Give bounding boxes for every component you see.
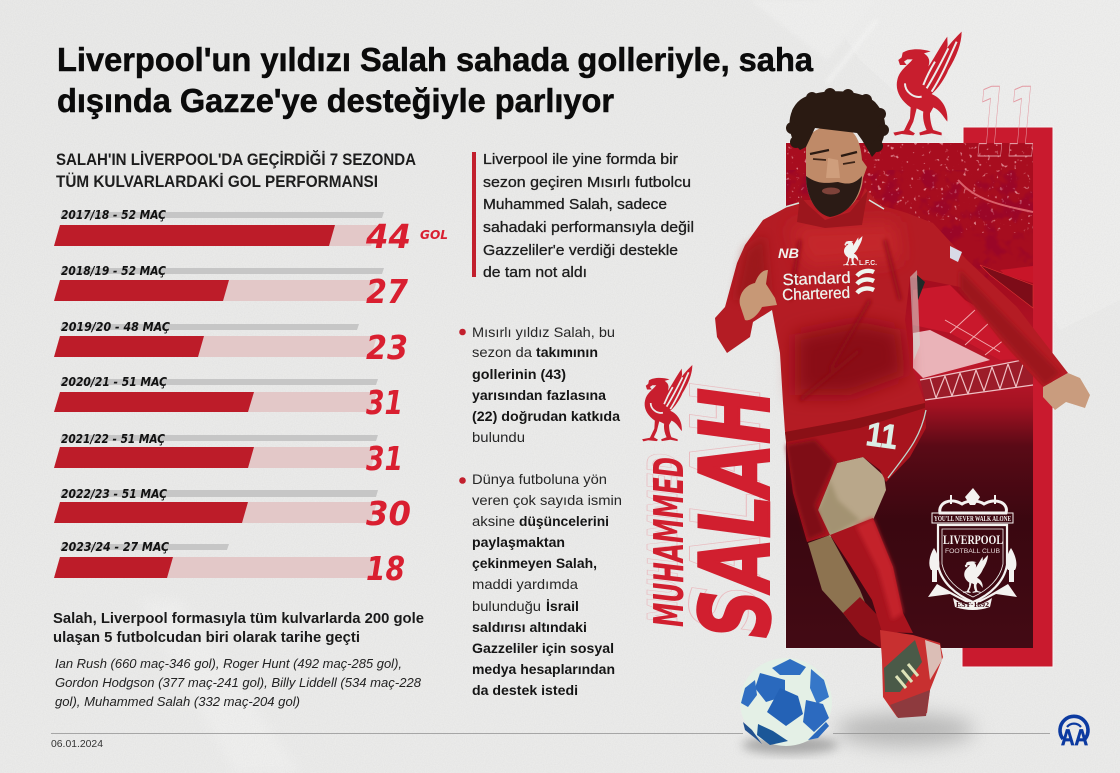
title: dışında Gazze'ye desteğiyle parlıyor xyxy=(57,82,614,119)
chart heading: SALAH'IN LİVERPOOL'DA GEÇİRDİĞİ 7 SEZONDA xyxy=(56,150,416,169)
bullet: goals contribution: takımının xyxy=(536,344,598,360)
bar row 2019/20 xyxy=(54,320,408,367)
sponsor wordmark: Standard xyxy=(782,270,851,289)
icon: AA agency logo xyxy=(1060,716,1088,750)
kit maker mark: NB xyxy=(778,245,799,261)
bullet: support for Gaza: saldırısı altındaki xyxy=(472,619,587,635)
title xyxy=(57,41,814,119)
bullet: support for Gaza: Dünya futboluna yön xyxy=(472,471,607,487)
bullet: support for Gaza: İsrail xyxy=(546,598,579,614)
bullet: support for Gaza: aksine xyxy=(472,513,515,529)
note: 200 goal club: Ian Rush (660 maç-346 gol), Roger Hunt (492 maç-285 gol), xyxy=(55,657,402,671)
bar row 2017/18: GOL xyxy=(420,228,448,242)
bar row 2019/20: 2019/20 - 48 MAÇ xyxy=(61,320,170,334)
note: 200 goal club: Gordon Hodgson (377 maç-241 gol), Billy Liddell (534 maç-228 xyxy=(55,676,421,690)
bar row 2023/24: 2023/24 - 27 MAÇ xyxy=(61,540,169,554)
bar row 2021/22: 31 xyxy=(366,439,403,478)
shield xyxy=(938,525,1007,602)
vertical name: SALAH: SALAH xyxy=(671,382,783,632)
panel: red backing strip xyxy=(786,127,1053,667)
title: Liverpool'un yıldızı Salah sahada golleriyle, saha xyxy=(57,41,814,78)
bullet: goals contribution: sezon da xyxy=(472,344,532,360)
lower roof truss xyxy=(920,358,1033,400)
bar row 2020/21: 31 xyxy=(366,383,403,422)
note: 200 goal club: gol), Muhammed Salah (332 maç-204 gol) xyxy=(55,695,300,709)
bullet: support for Gaza: Gazzeliler için sosyal xyxy=(472,640,614,656)
vertical name: MUHAMMED: MUHAMMED xyxy=(645,457,693,627)
bullet: goals contribution: gollerinin (43) xyxy=(472,366,566,382)
bullet: support for Gaza: maddi yardımda xyxy=(472,576,578,592)
intro text block xyxy=(472,152,694,281)
collar xyxy=(785,190,884,228)
vertical name: MUHAMMED: MUHAMMED xyxy=(639,453,687,623)
shorts number 11: 11 xyxy=(864,415,900,457)
ground shadow xyxy=(835,714,975,746)
sponsor logo xyxy=(857,271,874,293)
footer line and date: 06.01.2024 xyxy=(51,738,103,750)
bullet: support for Gaza: medya hesaplarından xyxy=(472,661,615,677)
red stands xyxy=(913,285,1033,360)
bullet: goals contribution: bulundu xyxy=(472,429,525,445)
bar row 2023/24 xyxy=(54,540,405,588)
shield: FOOTBALL CLUB xyxy=(945,548,1000,555)
sponsor wordmark: Chartered xyxy=(782,285,850,304)
thigh xyxy=(818,457,886,537)
intro text block: de tam not aldı xyxy=(483,265,587,281)
club badge: L.F.C. xyxy=(859,260,877,267)
bar row 2020/21 xyxy=(54,375,403,422)
intro text block: sahadaki performansıyla değil xyxy=(483,220,694,236)
sleeve badge xyxy=(950,246,962,262)
boot xyxy=(880,630,943,718)
bar row 2017/18: 44 xyxy=(365,217,411,256)
text: 11 xyxy=(976,69,1038,179)
intro text block: Liverpool ile yine formda bir xyxy=(483,152,678,168)
upper roof truss xyxy=(980,265,1033,308)
bar row 2022/23: 30 xyxy=(366,494,411,533)
note: 200 goal club: ulaşan 5 futbolcudan biri olarak tarihe geçti xyxy=(53,630,360,646)
ribbon: EST·1892 xyxy=(956,600,989,609)
note: 200 goal club xyxy=(53,611,424,709)
left hand xyxy=(740,270,777,320)
chart heading: TÜM KULVARLARDAKİ GOL PERFORMANSI xyxy=(56,172,378,191)
bullet: support for Gaza: bulunduğu xyxy=(472,598,541,614)
sponsor wordmark xyxy=(781,270,851,304)
sock xyxy=(830,518,913,633)
icon: small liver bird xyxy=(642,365,692,441)
bullet: support for Gaza xyxy=(459,471,622,698)
bullet: support for Gaza: veren çok sayıda ismin xyxy=(472,492,622,508)
bar row 2021/22: 2021/22 - 51 MAÇ xyxy=(61,432,165,446)
bar row 2018/19: 27 xyxy=(366,272,408,311)
bullet: support for Gaza: da destek istedi xyxy=(472,682,578,698)
bar row 2023/24: 18 xyxy=(366,549,405,588)
panel: stadium photo xyxy=(786,143,1033,648)
ball shadow xyxy=(742,736,838,754)
club badge xyxy=(843,236,877,267)
bullet: goals contribution: Mısırlı yıldız Salah, bu xyxy=(472,324,615,340)
shorts xyxy=(785,400,926,542)
icon: large liver bird xyxy=(893,32,962,136)
shirt xyxy=(715,188,1068,442)
torches xyxy=(929,548,1016,582)
right hand xyxy=(1043,373,1090,410)
vertical name: MUHAMMED xyxy=(639,453,693,627)
shield: LIVERPOOL xyxy=(943,532,1003,547)
bar chart: goals per season xyxy=(54,208,448,588)
head xyxy=(786,88,889,217)
motto banner: YOU'LL NEVER WALK ALONE xyxy=(934,514,1011,523)
stadium crowd texture xyxy=(786,143,1033,233)
player: Mohamed Salah xyxy=(715,88,1090,718)
bullet: goals contribution: (22) doğrudan katkıda xyxy=(472,408,620,424)
crest: Liverpool FC xyxy=(928,488,1017,610)
bar row 2021/22 xyxy=(54,432,403,478)
bullet: support for Gaza: düşüncelerini xyxy=(519,513,609,529)
back leg xyxy=(808,535,884,650)
intro text block: Gazzeliler'e verdiği destekle xyxy=(483,243,678,259)
bar row 2019/20: 23 xyxy=(366,328,408,367)
bar row 2020/21: 2020/21 - 51 MAÇ xyxy=(61,375,167,389)
hair xyxy=(786,88,889,157)
bar row 2018/19: 2018/19 - 52 MAÇ xyxy=(61,264,166,278)
bar row 2017/18: 2017/18 - 52 MAÇ xyxy=(61,208,166,222)
bullet: goals contribution xyxy=(459,324,620,445)
bullet: support for Gaza: çekinmeyen Salah, xyxy=(472,555,597,571)
vertical name: SALAH: SALAH xyxy=(680,388,792,638)
bullet: support for Gaza: paylaşmaktan xyxy=(472,534,565,550)
intro text block: Muhammed Salah, sadece xyxy=(483,197,667,213)
icon: AA agency logo: AA xyxy=(1061,725,1088,750)
bullet: goals contribution: yarısından fazlasına xyxy=(472,387,606,403)
pitch xyxy=(913,330,990,378)
note: 200 goal club: Salah, Liverpool formasıyla tüm kulvarlarda 200 gole xyxy=(53,611,424,627)
chart heading xyxy=(56,150,416,191)
bar row 2022/23 xyxy=(54,487,411,533)
bar row 2022/23: 2022/23 - 51 MAÇ xyxy=(61,487,167,501)
bar row 2018/19 xyxy=(54,264,408,311)
intro text block: sezon geçiren Mısırlı futbolcu xyxy=(483,175,691,191)
crest gates ornament xyxy=(940,488,1006,513)
bar row 2017/18 xyxy=(54,208,448,256)
vertical name: SALAH xyxy=(671,382,792,638)
icon: football xyxy=(740,658,832,746)
